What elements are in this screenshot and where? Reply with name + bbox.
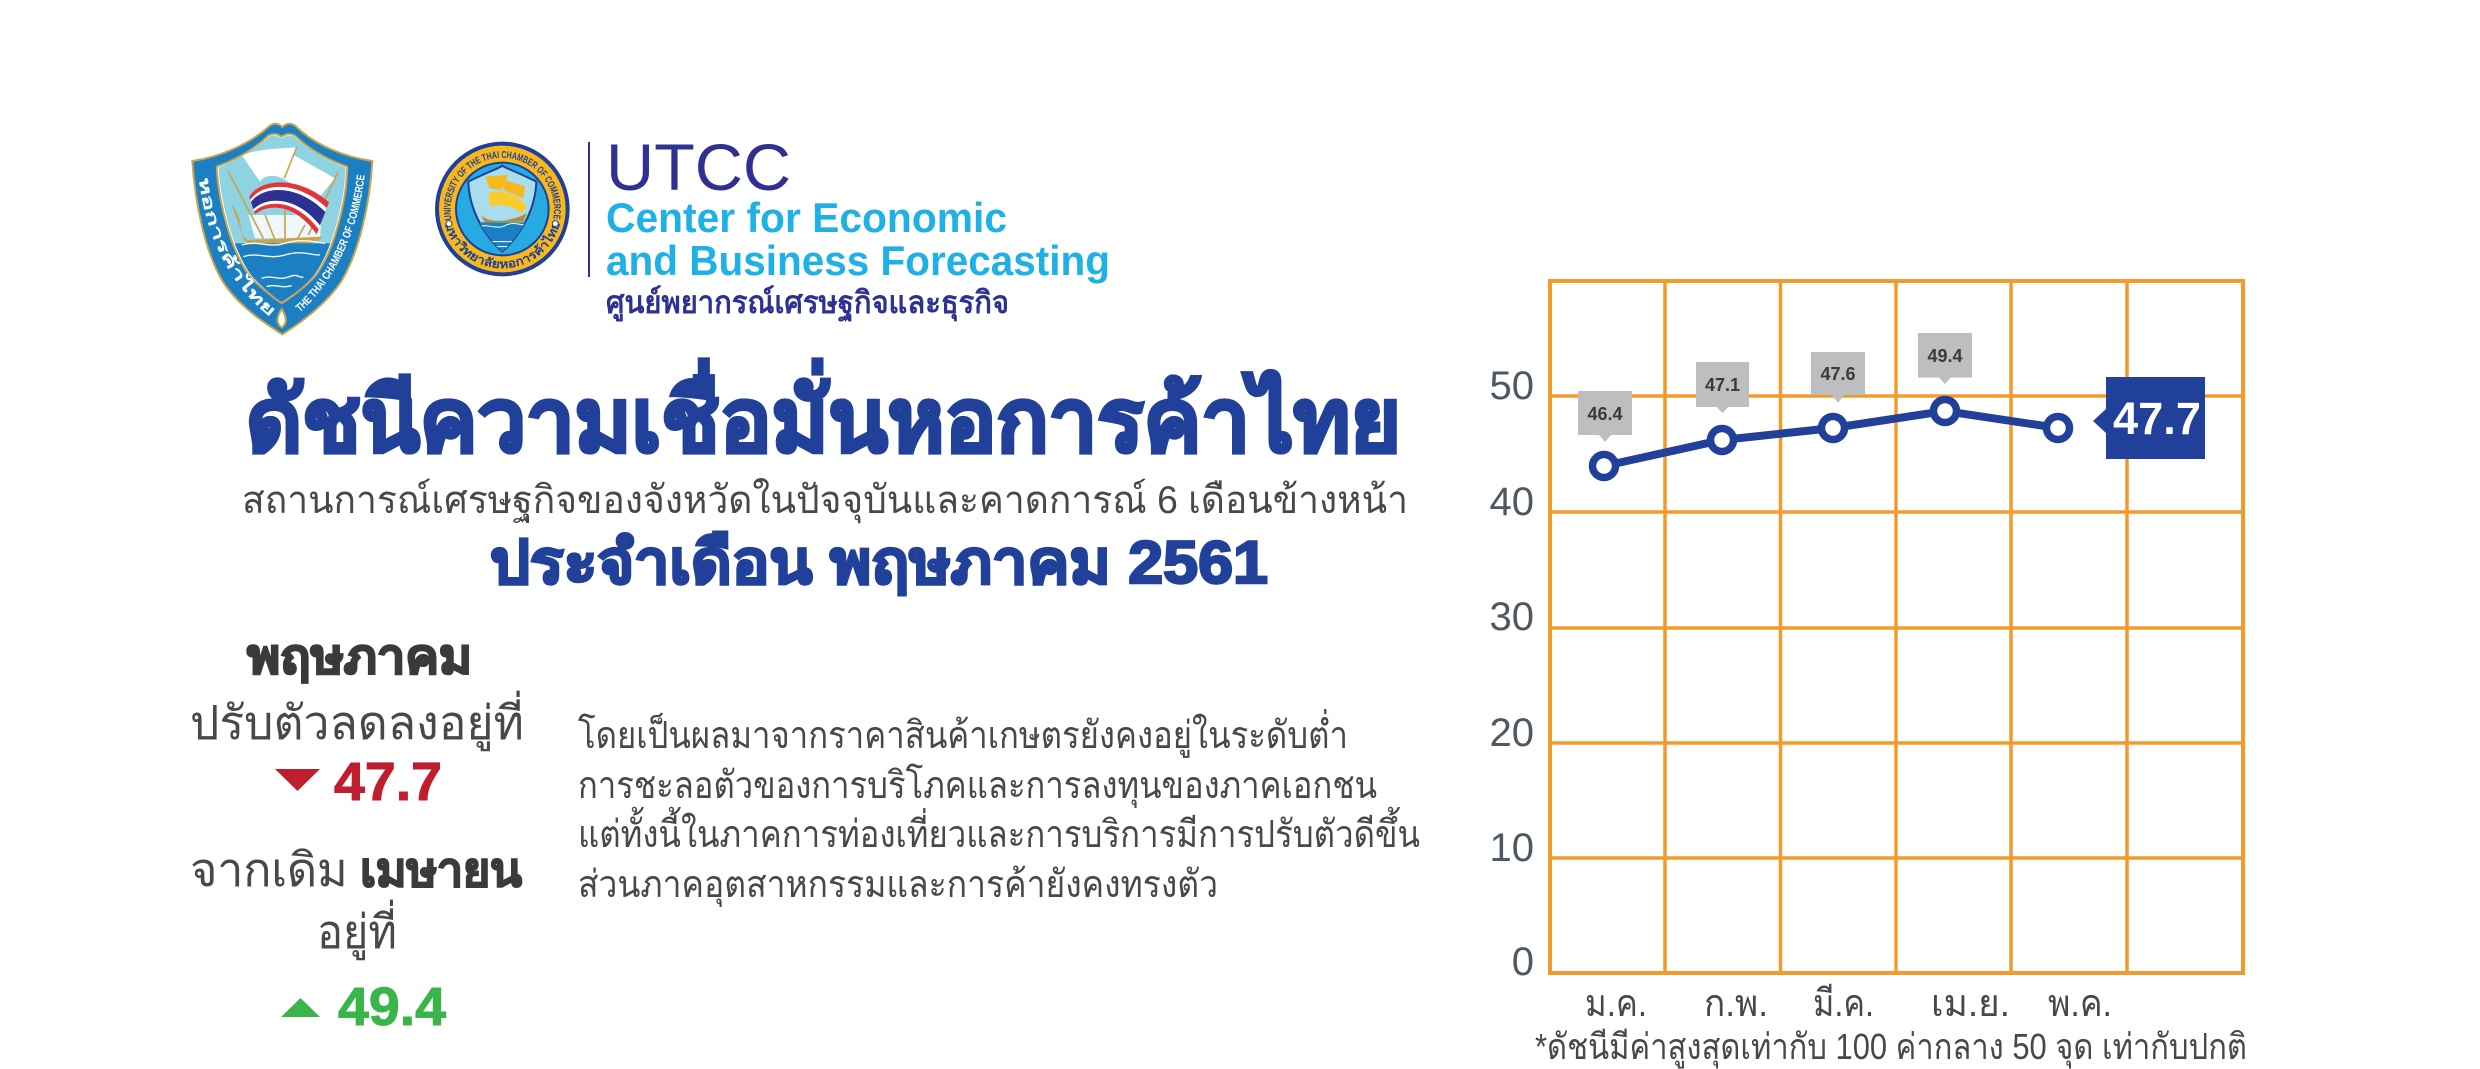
data line [1604,411,2058,466]
x axis labels: ก.พ. [1704,983,1768,1025]
y axis labels: 50 [1490,364,1534,408]
y axis labels: 0 [1512,940,1534,984]
line chart [1490,281,2243,1025]
y axis labels: 30 [1490,595,1534,639]
y axis labels: 10 [1490,826,1534,870]
month heading: May: พฤษภาคม [247,631,472,684]
x axis labels: เม.ย. [1931,983,2010,1025]
logo: UTCC university seal: UNIVERSITY OF THE THAI CHAMBER OF COMMERCE [444,151,561,220]
logo wordmark: UTCC Center for Economic and Business Forecasting: Center for Economic [606,194,1007,241]
callout: current value 47.7: 47.7 [2113,393,2201,444]
footnote: *ดัชนีมีค่าสูงสุดเท่ากับ 100 ค่ากลาง 50 จุด เท่ากับปกติ [1535,1026,2247,1069]
y axis labels: 20 [1490,711,1534,755]
logo: Thai Chamber of Commerce shield: หอการค้าไทย [199,178,275,316]
logo wordmark: UTCC Center for Economic and Business Forecasting: and Business Forecasting [606,237,1110,284]
callout: 46.4 [1578,391,1632,442]
date heading: ประจำเดือน พฤษภาคม 2561 [490,529,1268,596]
value: 47.7: 47.7 [334,752,442,812]
logo wordmark: UTCC Center for Economic and Business Forecasting: ศูนย์พยากรณ์เศรษฐกิจและธุรกิจ [606,285,1009,323]
explanatory paragraph: โดยเป็นผลมาจากราคาสินค้าเกษตรยังคงอยู่ในระดับต่ำ [578,709,1348,758]
x axis labels [1585,983,2112,1025]
x axis labels: มี.ค. [1813,983,1874,1025]
x axis labels: พ.ค. [2048,983,2112,1025]
data points [1592,400,2070,478]
callout: 47.6: 47.6 [1820,364,1856,384]
callout: 46.4: 46.4 [1587,404,1623,424]
divider line beside UTCC logo [588,142,590,277]
logo: UTCC university seal [435,142,570,276]
callout: 47.6 [1811,352,1865,403]
logo: UTCC university seal: มหาวิทยาลัยหอการค้าไทย [445,224,560,268]
callout: 49.4: 49.4 [1927,346,1963,366]
text: from April: จากเดิม เมษายน [190,843,522,896]
explanatory paragraph: แต่ทั้งนี้ในภาคการท่องเที่ยวและการบริการมีการปรับตัวดีขึ้น [578,806,1420,856]
logo: Thai Chamber of Commerce shield: THE THAI CHAMBER OF COMMERCE [294,174,365,311]
logo wordmark: UTCC Center for Economic and Business Forecasting: UTCC [606,130,791,204]
logo wordmark: UTCC Center for Economic and Business Forecasting [606,130,1110,323]
callout: 49.4 [1918,333,1972,384]
title: ดัชนีความเชื่อมั่นหอการค้าไทย [246,359,1401,470]
explanatory paragraph: การชะลอตัวของการบริโภคและการลงทุนของภาคเอกชน [578,763,1377,808]
text: at: อยู่ที่ [317,899,397,961]
icon: red down triangle [275,769,320,791]
explanatory paragraph: ส่วนภาคอุตสาหกรรมและการค้ายังคงทรงตัว [578,864,1218,907]
y axis labels: 40 [1490,480,1534,524]
subtitle: สถานการณ์เศรษฐกิจของจังหวัดในปัจจุบันและคาดการณ์ 6 เดือนข้างหน้า [242,478,1408,524]
callout: current value 47.7 [2093,377,2205,459]
x axis labels: ม.ค. [1585,983,1647,1025]
callout: 47.1: 47.1 [1705,375,1740,395]
value: 49.4: 49.4 [338,977,446,1037]
y axis labels [1490,364,1534,984]
chart grid [1550,281,2243,973]
icon: green up triangle [281,998,320,1017]
logo: Thai Chamber of Commerce shield [191,122,374,336]
callout: 47.1 [1696,362,1749,413]
summary panel: May versus April [190,631,524,1037]
text: adjusted down: ปรับตัวลดลงอยู่ที่ [190,690,524,752]
explanatory paragraph [578,709,1420,907]
